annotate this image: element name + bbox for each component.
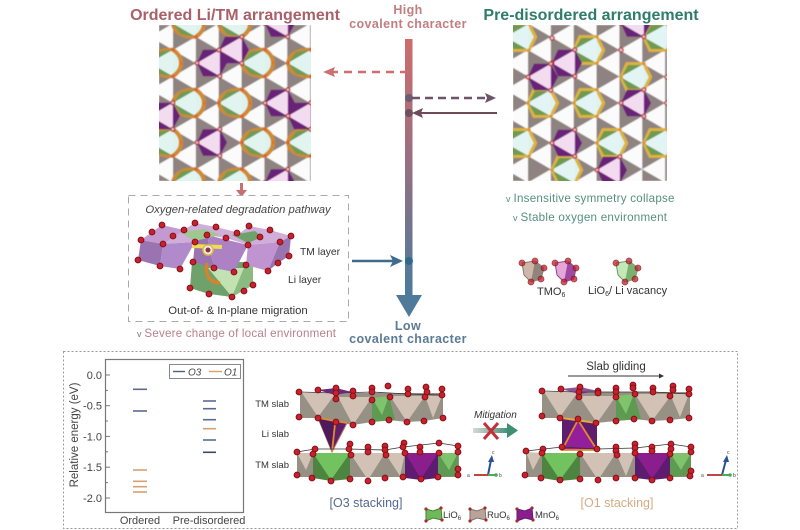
arrow: dashed to pre-disordered [405,93,496,103]
arrow: ordered lattice to pathway [236,183,247,197]
y axis ticks: -2.0 [83,493,102,505]
icon: axes O3 [467,450,502,479]
chart: relative energy [69,360,245,527]
label: low covalent character: covalent character [349,332,467,346]
arrow: pathway to low covalent [352,255,413,267]
x axis labels: Pre-disordered [173,515,245,527]
icon: LiO6 [424,506,444,523]
icon: MnO6 [515,506,535,523]
text: severe change: v Severe change of local environment [137,327,337,340]
energy levels O3 [133,389,216,452]
panel: bottom stacking comparison [64,352,738,528]
structure: tm layer [138,223,291,272]
icon: axes O3: a [467,473,470,479]
label: TMO6: 6 [561,292,565,299]
caption: O3 stacking: [O3 stacking] [330,496,402,510]
panel: pre-disordered lattice [513,25,667,181]
label: migration: Out-of- & In-plane migration [168,305,308,317]
text: stable oxygen environment: v Stable oxygen environment [513,211,668,224]
title: ordered arrangement: Ordered Li/TM arrangement [130,7,341,24]
structure: O1 stacking [522,382,694,483]
arrow: mitigation blocked [473,423,518,439]
slab labels: TM slab [255,460,289,471]
label: slab gliding: Slab gliding [586,361,646,373]
label: LiO6 / Li vacancy: / Li vacancy [609,285,668,297]
icon: taupe TMO6 [519,258,547,285]
icon: RuO6 [468,506,488,523]
x axis labels [120,515,245,527]
energy levels O1 [133,429,216,492]
label: TM layer: TM layer [300,247,341,258]
label: TMO6: TMO [537,286,561,298]
icon: axes O1: c [727,450,730,456]
label: low covalent character: Low [395,319,421,333]
icon: pink TMO6 [552,258,579,285]
legend: polyhedra key [519,258,668,299]
arrow: dashed to ordered [323,67,408,77]
Li slab tetrahedron [318,418,347,452]
label: high covalent character: High [393,3,423,17]
legend: O3 O1: O3 [188,368,202,378]
icon: axes O1 [701,450,736,479]
panel: ordered lattice [159,25,311,181]
panel: degradation pathway [128,196,348,322]
legend: LiO6 RuO6 MnO6: LiO [443,510,458,521]
legend: LiO6 RuO6 MnO6: 6 [507,516,511,522]
y axis ticks: 0.0 [87,370,102,382]
legend: LiO6 RuO6 MnO6 [424,506,560,523]
title: pre-disordered arrangement: Pre-disordered arrangement [483,7,699,24]
structure: li layer [190,262,253,297]
legend: LiO6 RuO6 MnO6: 6 [556,516,560,522]
label: LiO6 / Li vacancy: LiO [588,285,605,297]
icon: migration arrows [192,245,222,283]
label: LiO6 / Li vacancy: 6 [605,291,609,298]
y axis title: Relative energy (eV) [69,382,81,487]
heading: degradation pathway: Oxygen-related degradation pathway [145,204,332,216]
legend: O3 O1: O1 [224,368,237,378]
label: high covalent character: covalent character [349,17,467,31]
slab labels: Li slab [262,429,289,440]
Li slab octahedron [561,418,597,450]
atoms: O1 oxygen [522,382,694,483]
icon: axes O3: b [499,473,502,479]
x axis labels: Ordered [120,515,160,527]
y axis ticks [83,370,102,505]
caption: O1 stacking: [O1 stacking] [581,496,653,510]
slab labels: TM slab [255,399,289,410]
label: Li layer: Li layer [288,275,322,286]
icon: axes O1: b [733,473,736,479]
y axis ticks: -1.5 [83,462,102,474]
icon: axes O3: c [492,450,495,456]
icon: axes O1: a [701,473,704,479]
legend: LiO6 RuO6 MnO6: MnO [535,510,556,521]
atoms: oxygen [135,220,294,300]
slab labels [255,399,289,471]
y axis ticks: -1.0 [83,431,102,443]
legend: O3 O1 [170,364,240,378]
arrow: slab gliding [568,374,664,378]
legend: LiO6 RuO6 MnO6: 6 [458,516,462,522]
icon: green LiO6 [613,258,641,285]
atoms: O3 oxygen [294,383,461,484]
label: mitigation: Mitigation [474,410,517,421]
y axis ticks: -0.5 [83,401,102,413]
text: insensitive symmetry collapse: v Insensitive symmetry collapse [506,192,675,205]
legend: LiO6 RuO6 MnO6: RuO [487,510,507,521]
arrow: from pre-disordered [405,108,497,118]
structure: O3 stacking [294,383,461,484]
central covalent axis arrow [396,39,422,317]
